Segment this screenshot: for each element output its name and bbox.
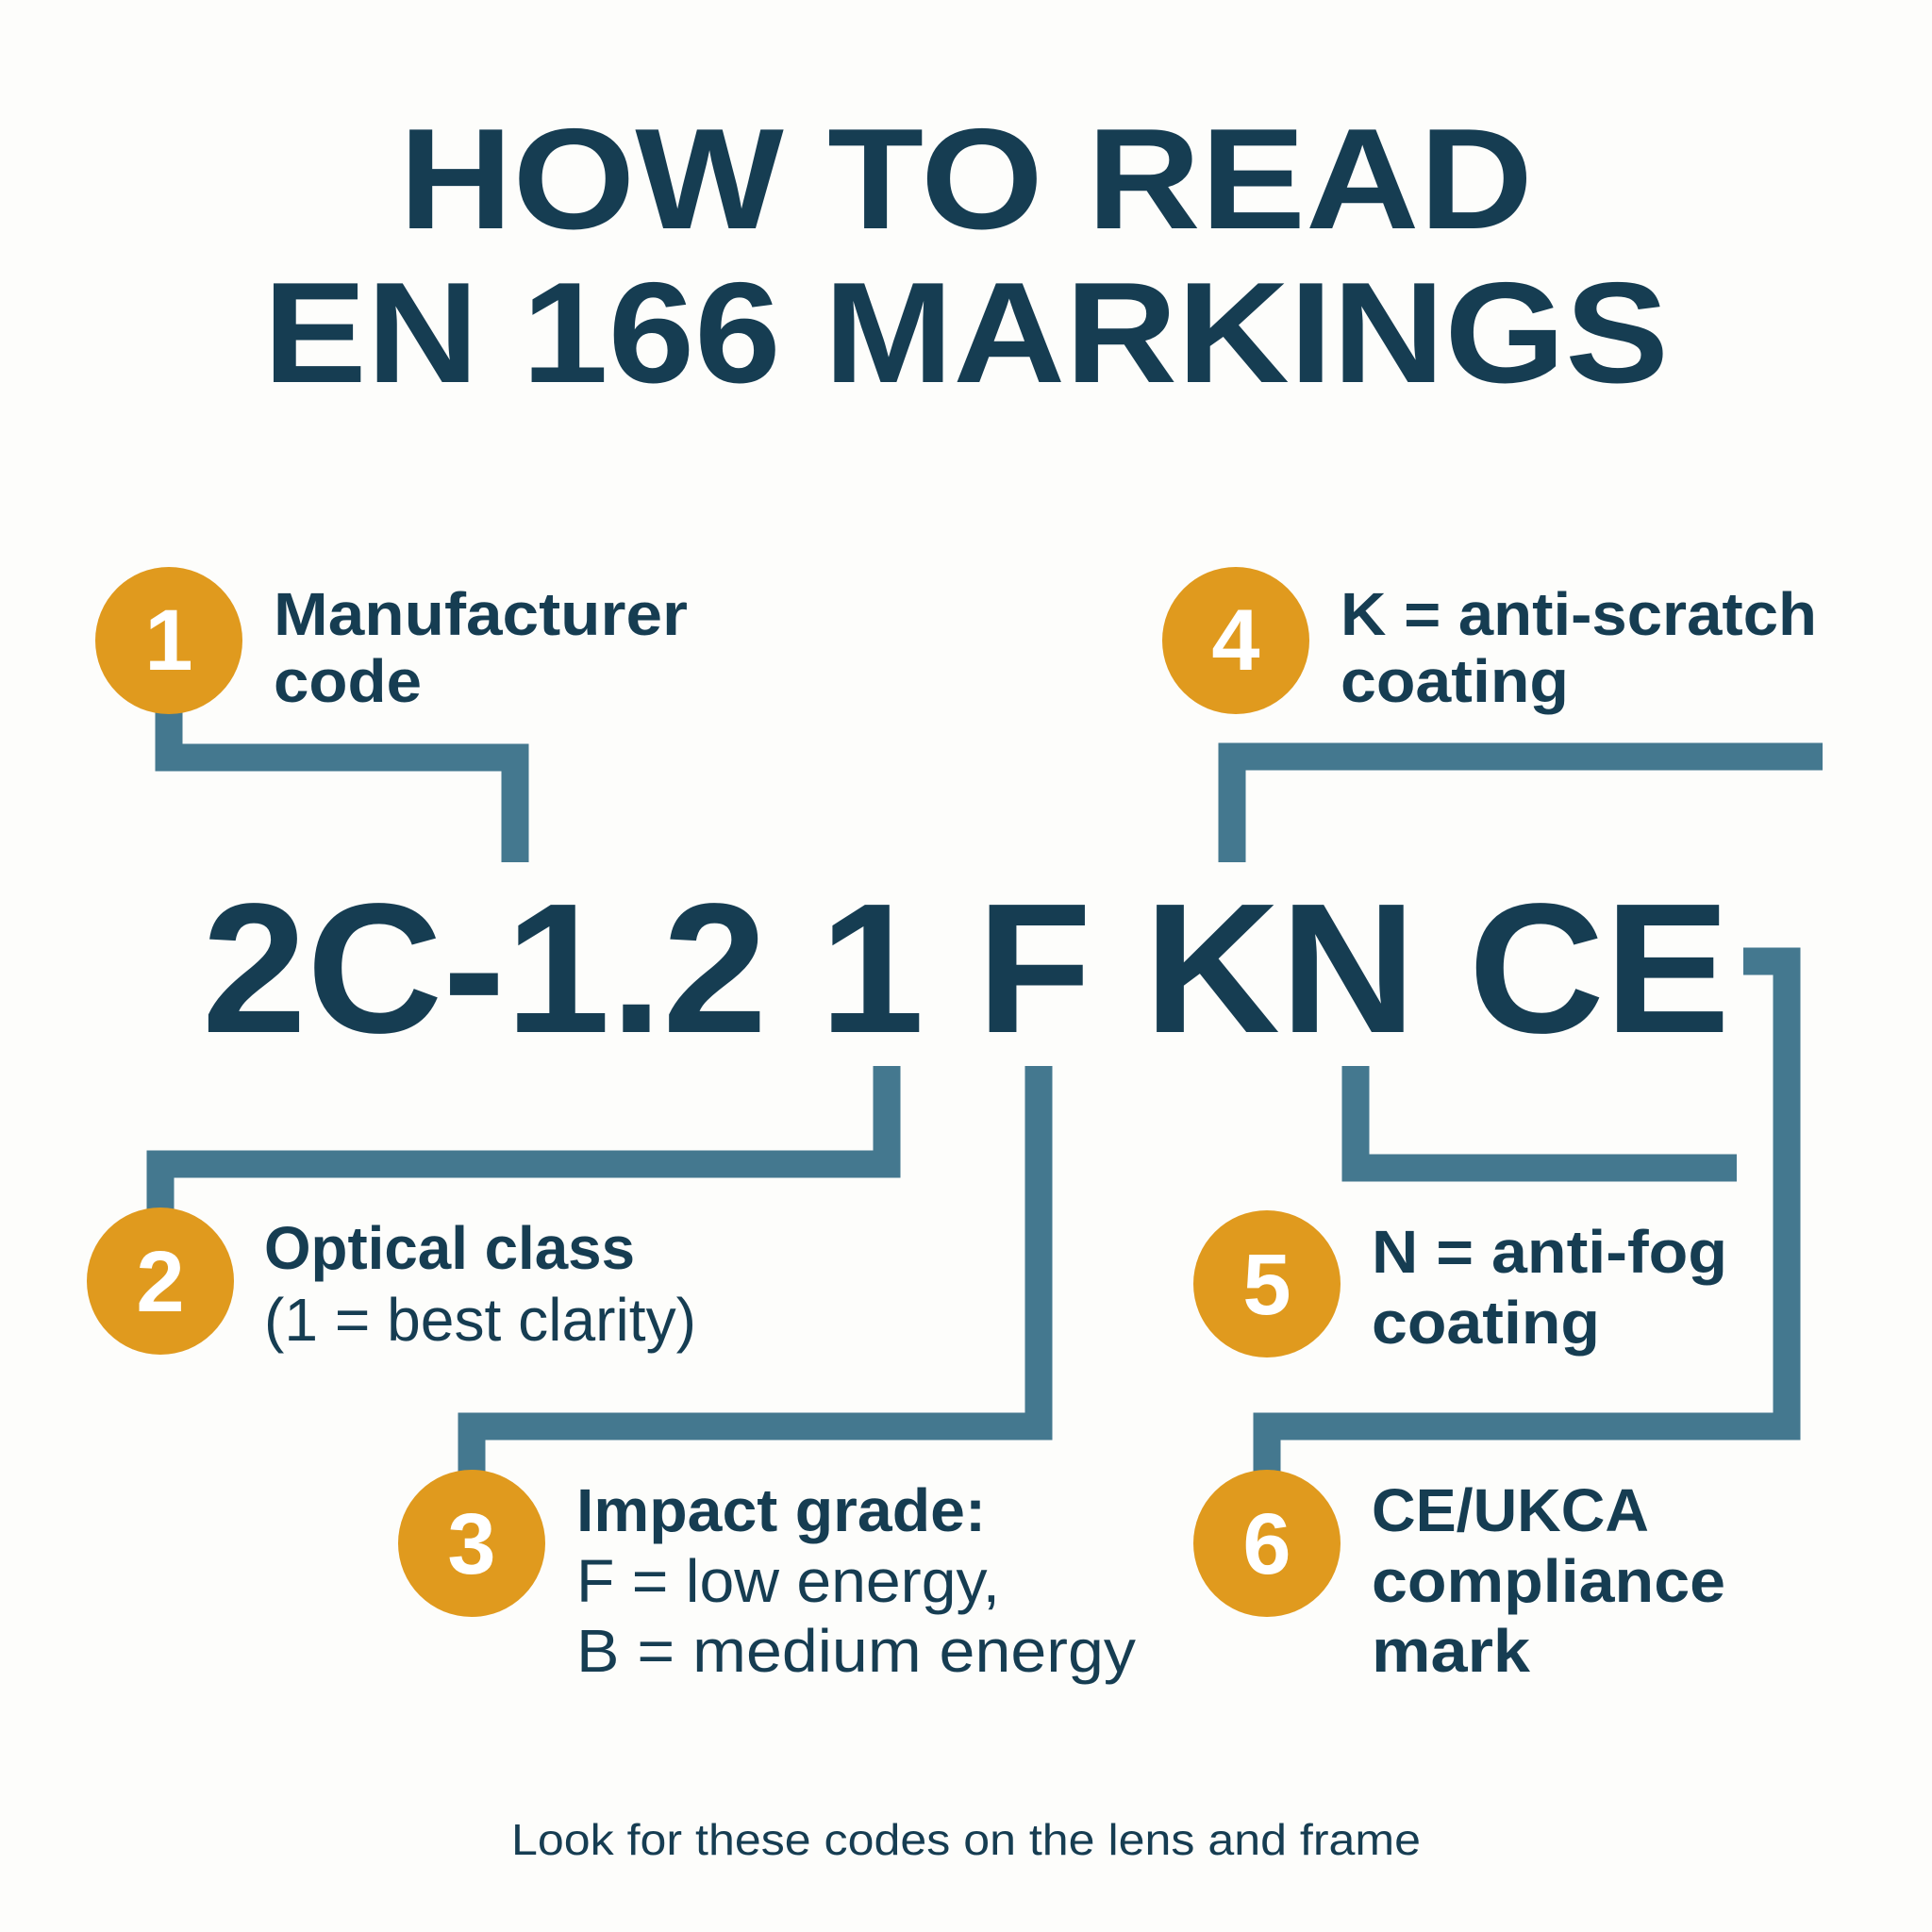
item 6 <box>1193 1470 1725 1685</box>
item 3: Impact grade: <box>576 1476 986 1544</box>
item 3: F = low energy, <box>576 1547 1000 1615</box>
item 6: CE/UKCA <box>1372 1476 1649 1544</box>
item 4: 4 <box>1211 592 1260 689</box>
title: HOW TO READ <box>399 99 1533 259</box>
item 1: 1 <box>144 592 193 689</box>
connector lines <box>160 698 1823 1481</box>
item 4 <box>1162 567 1817 715</box>
item 4: K = anti-scratch <box>1341 580 1817 648</box>
item 6: compliance <box>1372 1547 1725 1615</box>
title: EN 166 MARKINGS <box>263 253 1669 413</box>
item 3: B = medium energy <box>576 1617 1136 1685</box>
item 5: 5 <box>1242 1237 1291 1333</box>
item 1: code <box>274 647 422 715</box>
marking code: 2C-1.2 1 F KN CE <box>202 865 1730 1072</box>
item 3: 3 <box>447 1496 496 1592</box>
footer note: Look for these codes on the lens and frame <box>511 1815 1421 1864</box>
item 5: N = anti-fog <box>1372 1218 1727 1286</box>
item 5 <box>1193 1210 1727 1357</box>
item 2: (1 = best clarity) <box>264 1286 696 1354</box>
item 4: coating <box>1341 647 1569 715</box>
title <box>263 99 1669 413</box>
item 3 <box>398 1470 1136 1685</box>
item 2: Optical class <box>264 1214 635 1282</box>
item 1: Manufacturer <box>274 580 688 648</box>
item 6: 6 <box>1242 1496 1291 1592</box>
item 6: mark <box>1372 1617 1530 1685</box>
item 1 <box>95 567 688 715</box>
item 2: 2 <box>136 1234 185 1330</box>
item 5: coating <box>1372 1289 1600 1357</box>
item 2 <box>87 1208 696 1355</box>
